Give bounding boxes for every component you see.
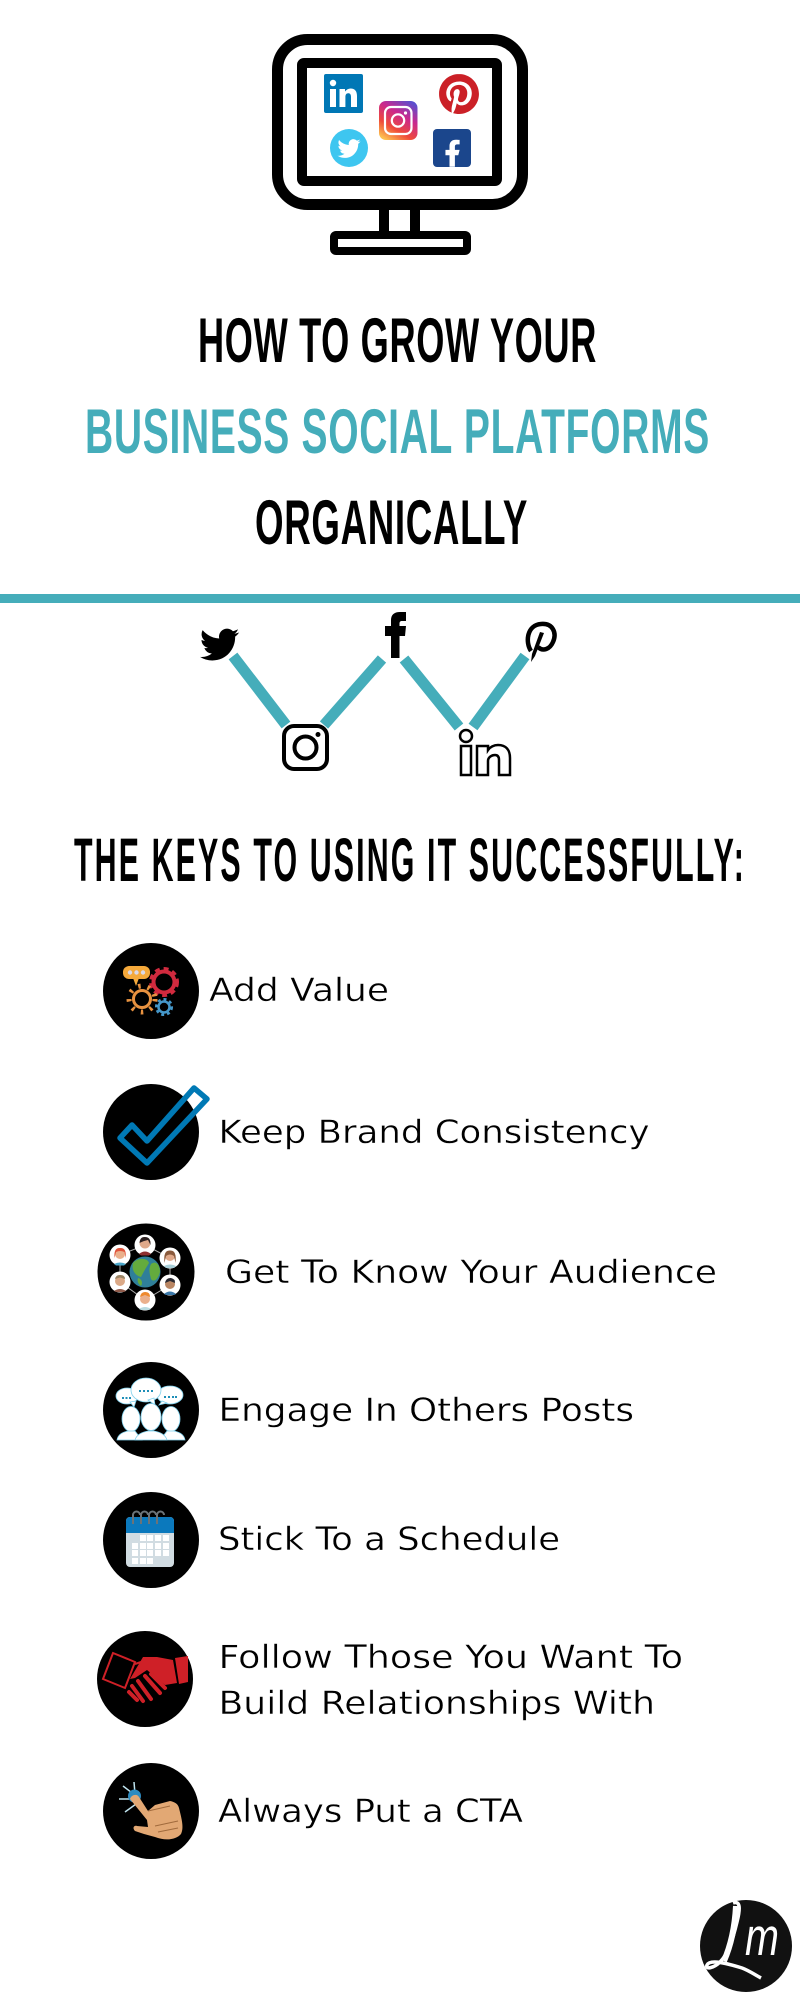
logo: Lm	[700, 1900, 792, 1992]
logo: Lm: m	[745, 1908, 779, 1967]
icon: people around globe	[98, 1224, 194, 1320]
label: Build Relationships With	[218, 1684, 655, 1722]
icon: pinterest logo	[439, 74, 479, 114]
label: Get To Know Your Audience	[225, 1253, 717, 1291]
icon: instagram logo	[379, 101, 418, 140]
icon: check mark	[103, 1084, 207, 1180]
icon: computer monitor with social logos	[278, 40, 522, 251]
label: Always Put a CTA	[218, 1792, 523, 1830]
icon: twitter bird	[200, 629, 239, 660]
list item: follow those you want to build relationships with	[97, 1631, 683, 1727]
icon: instagram outline	[284, 726, 327, 769]
icon: gears	[103, 943, 199, 1039]
divider bar	[0, 594, 800, 603]
list item: add value	[103, 943, 389, 1039]
label: Add Value	[209, 971, 389, 1009]
icon: facebook f	[385, 612, 406, 658]
connector lines	[233, 656, 525, 727]
title: ORGANICALLY	[255, 488, 528, 558]
icon: calendar	[103, 1492, 199, 1588]
label: Stick To a Schedule	[218, 1520, 560, 1558]
zigzag of social icons	[200, 612, 554, 775]
list item: always put a cta	[103, 1763, 523, 1859]
icon: handshake	[97, 1631, 193, 1727]
icon: pinterest p tail	[531, 632, 544, 662]
label: Engage In Others Posts	[218, 1391, 634, 1429]
icon: people with speech bubbles	[103, 1362, 199, 1458]
list item: keep brand consistency	[103, 1084, 650, 1180]
list item: engage in others posts	[103, 1362, 634, 1458]
list item: stick to a schedule	[103, 1492, 560, 1588]
label: Keep Brand Consistency	[218, 1113, 650, 1151]
label: Follow Those You Want To	[218, 1638, 683, 1676]
avatars	[114, 1237, 176, 1310]
label	[218, 1638, 683, 1722]
icon: pinterest p	[528, 624, 554, 651]
icon: linkedin logo	[324, 74, 363, 113]
list item: get to know your audience	[98, 1224, 717, 1320]
icon: linkedin outline	[460, 730, 510, 775]
title	[85, 306, 710, 558]
icon: facebook logo	[433, 129, 471, 167]
icon: twitter logo	[330, 129, 368, 167]
icon: pointing hand	[103, 1763, 199, 1859]
